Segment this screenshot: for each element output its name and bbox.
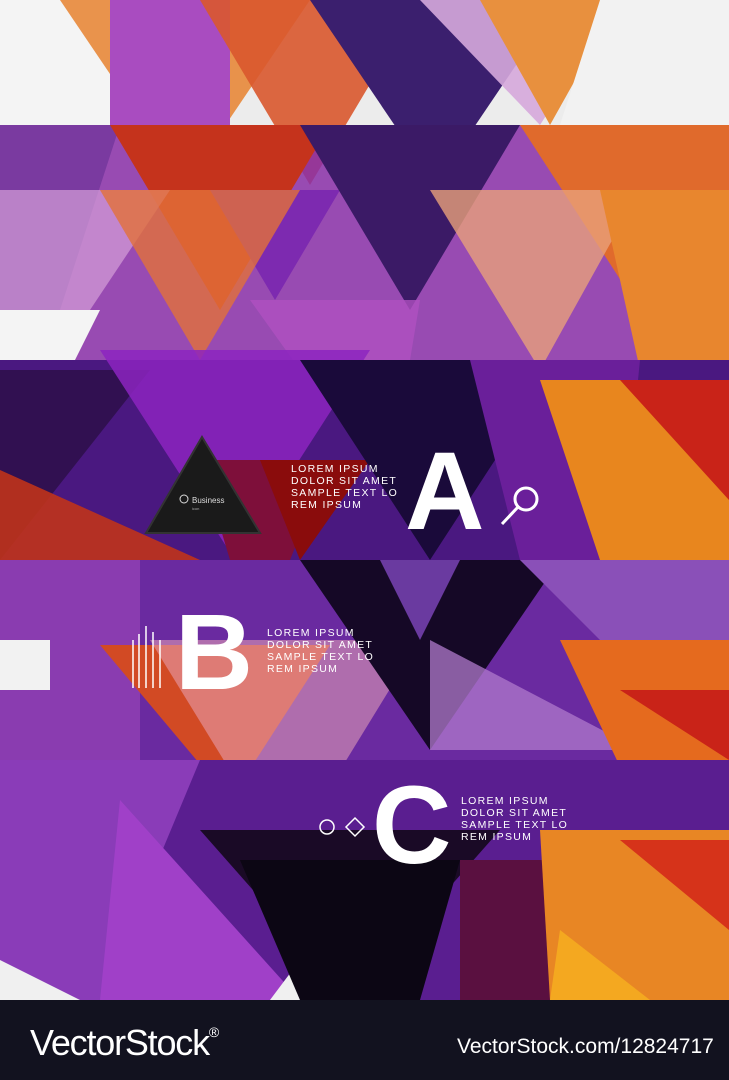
letter C: C bbox=[372, 764, 451, 887]
letter A: A bbox=[405, 430, 484, 553]
text block C: SAMPLE TEXT LO bbox=[461, 819, 568, 831]
text block B: LOREM IPSUM bbox=[267, 627, 355, 639]
text block B bbox=[267, 627, 374, 675]
footer: VectorStock bbox=[30, 1022, 209, 1063]
footer: ® bbox=[209, 1024, 220, 1040]
text block A bbox=[291, 463, 398, 511]
icon: magnifier bbox=[502, 488, 537, 524]
letter B: B bbox=[175, 591, 253, 712]
text block C bbox=[461, 795, 568, 843]
text block B: SAMPLE TEXT LO bbox=[267, 651, 374, 663]
text block B: DOLOR SIT AMET bbox=[267, 639, 373, 651]
text block A: DOLOR SIT AMET bbox=[291, 475, 397, 487]
icon: business triangle badge: Business bbox=[192, 496, 224, 505]
text block C: LOREM IPSUM bbox=[461, 795, 549, 807]
icon: business triangle badge bbox=[146, 437, 260, 533]
text block C: REM IPSUM bbox=[461, 831, 532, 843]
text block B: REM IPSUM bbox=[267, 663, 338, 675]
icon: business triangle badge: icon bbox=[192, 506, 199, 511]
footer bbox=[0, 1000, 729, 1080]
icon: vertical lines bbox=[133, 626, 160, 688]
text block C: DOLOR SIT AMET bbox=[461, 807, 567, 819]
icon: circle and diamond bbox=[320, 818, 364, 836]
text block A: LOREM IPSUM bbox=[291, 463, 379, 475]
text block A: SAMPLE TEXT LO bbox=[291, 487, 398, 499]
footer: VectorStock.com/12824717 bbox=[457, 1035, 714, 1058]
text block A: REM IPSUM bbox=[291, 499, 362, 511]
